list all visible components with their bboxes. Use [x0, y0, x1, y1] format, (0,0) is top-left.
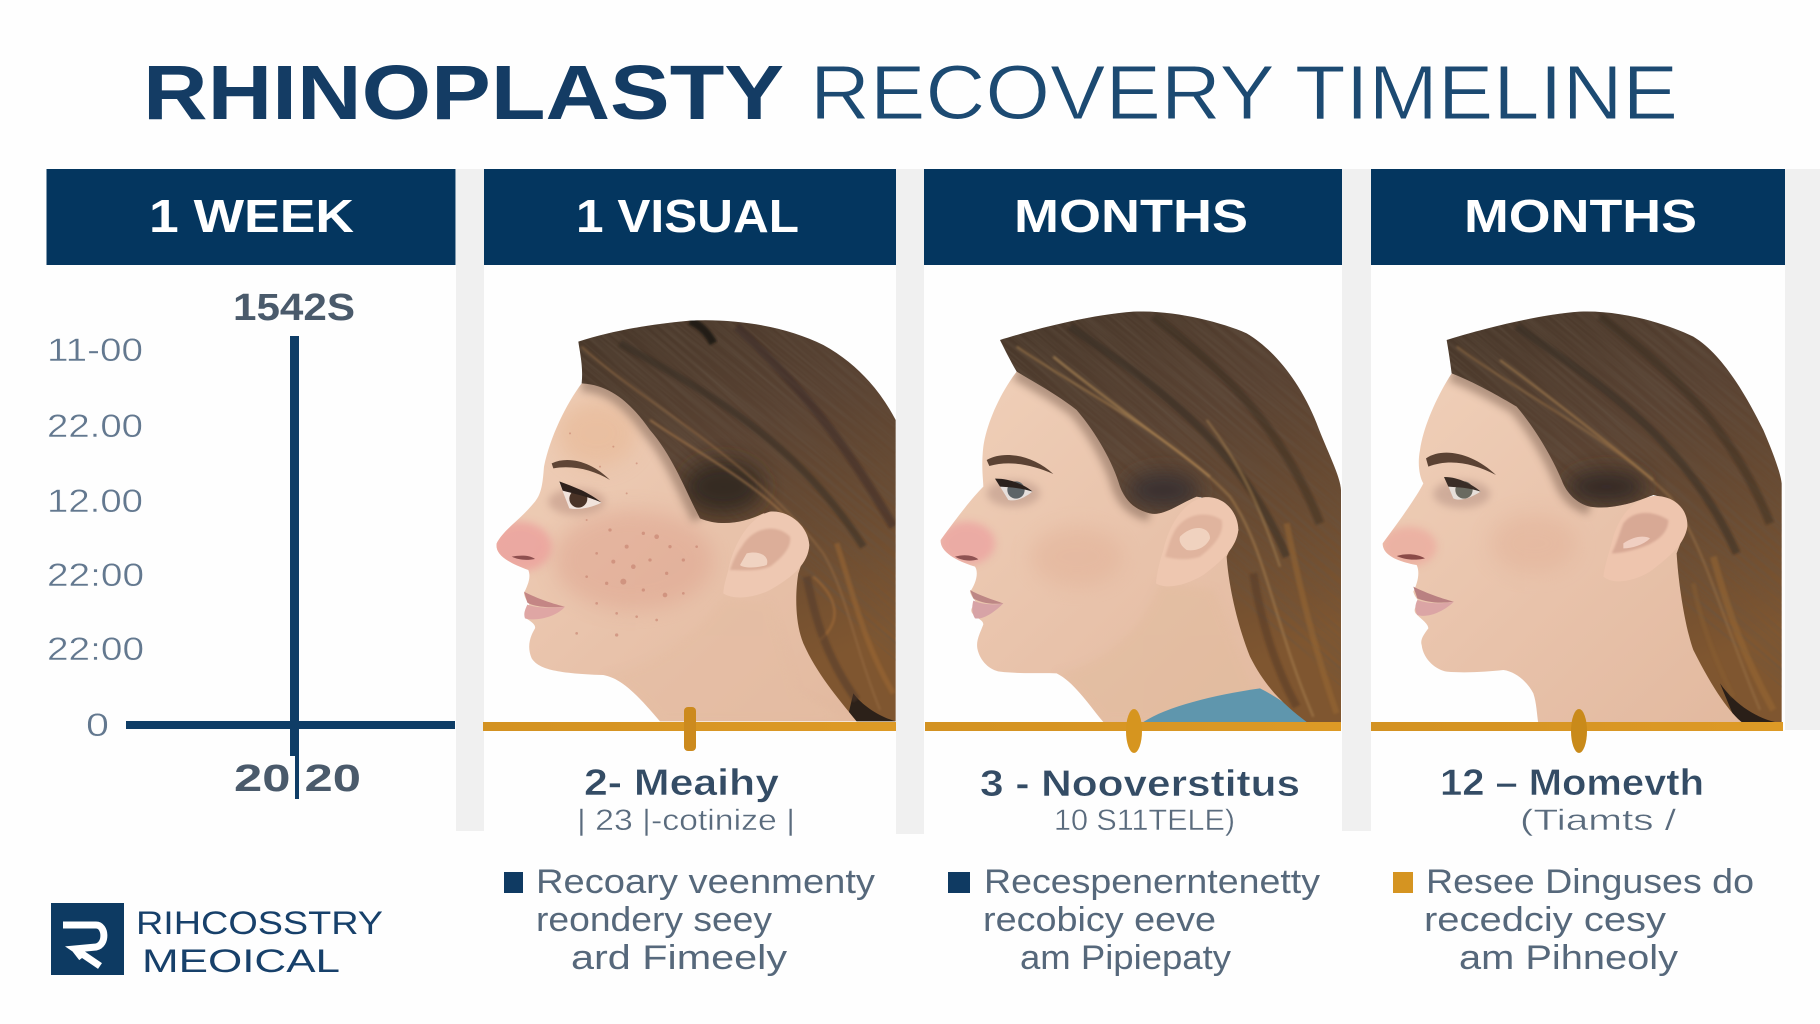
header: months: MONTHS [1464, 190, 1697, 242]
stage caption: (Tiamts / [1520, 804, 1677, 837]
axis labels: 22.00 [47, 408, 143, 444]
stage caption [577, 762, 795, 837]
bullet text: am Pihneoly [1459, 939, 1678, 977]
portrait: profile with redness [488, 320, 896, 721]
bullet text [948, 863, 1320, 977]
title [143, 50, 1678, 136]
header: 1 visual [484, 169, 896, 265]
shirt collar [1143, 688, 1308, 722]
gutter: between panels three and four [1342, 169, 1371, 831]
chart axes [126, 336, 455, 799]
title: RECOVERY TIMELINE [810, 50, 1678, 136]
bullet text: Recespenerntenetty [984, 863, 1320, 901]
gutter: right edge [1785, 169, 1820, 730]
stage caption: | 23 |-cotinize | [577, 804, 795, 837]
header: months: MONTHS [1014, 190, 1248, 242]
timeline bar with marker [1371, 709, 1783, 753]
axis labels: 12.00 [47, 483, 143, 519]
stage caption: 3 - Nooverstitus [980, 763, 1300, 804]
stage caption [1440, 762, 1704, 837]
title: RHINOPLASTY [143, 50, 784, 136]
axis labels: 22:00 [47, 631, 144, 667]
axis labels: 11-00 [47, 332, 143, 368]
stage caption: 12 – Momevth [1440, 762, 1704, 803]
panel: portrait stage four [1371, 169, 1785, 977]
chart bottom label: 20 20 [234, 758, 361, 800]
panel: portrait stage two [483, 169, 896, 977]
wordmark: RIHCOSSTRY [136, 905, 383, 941]
panel: 1 week chart [46, 169, 456, 800]
stage caption: 10 S11TELE) [1054, 804, 1235, 837]
bullet text [504, 863, 875, 977]
chart top label: 1542S [233, 287, 355, 329]
bullet text: ard Fimeely [571, 939, 787, 977]
portrait: final healed profile [1380, 312, 1782, 723]
timeline bar with marker [483, 707, 896, 751]
bullet text: Recoary veenmenty [536, 863, 875, 901]
axis labels: 22:00 [47, 557, 144, 593]
header: months [1371, 169, 1785, 265]
timeline bar with marker [925, 709, 1341, 753]
header: months [924, 169, 1342, 265]
gutter: between panels two and three [896, 169, 924, 834]
portrait: profile with blue shirt [938, 312, 1341, 722]
panel: portrait stage three [924, 169, 1342, 977]
icon: R mark [51, 903, 124, 975]
bullet text [1393, 863, 1754, 977]
bullet text: recedciy cesy [1424, 901, 1666, 939]
header: 1 visual: 1 VISUAL [576, 190, 799, 242]
wordmark [136, 905, 383, 979]
bullet text: reondery seey [536, 901, 772, 939]
stage caption: 2- Meaihy [584, 762, 779, 803]
header: 1 week [46, 169, 456, 265]
header: 1 week: 1 WEEK [149, 190, 354, 242]
bullet text: recobicy eeve [983, 901, 1216, 939]
wordmark: MEOICAL [142, 943, 340, 979]
gutter: between panels one and two [456, 169, 484, 831]
bullet text: Resee Dinguses do [1426, 863, 1754, 901]
bullet text: am Pipiepaty [1020, 939, 1231, 977]
axis labels: 0 [86, 707, 109, 743]
logo: rihcosstry medical [51, 903, 383, 979]
axis labels [47, 332, 144, 743]
stage caption [980, 763, 1300, 837]
